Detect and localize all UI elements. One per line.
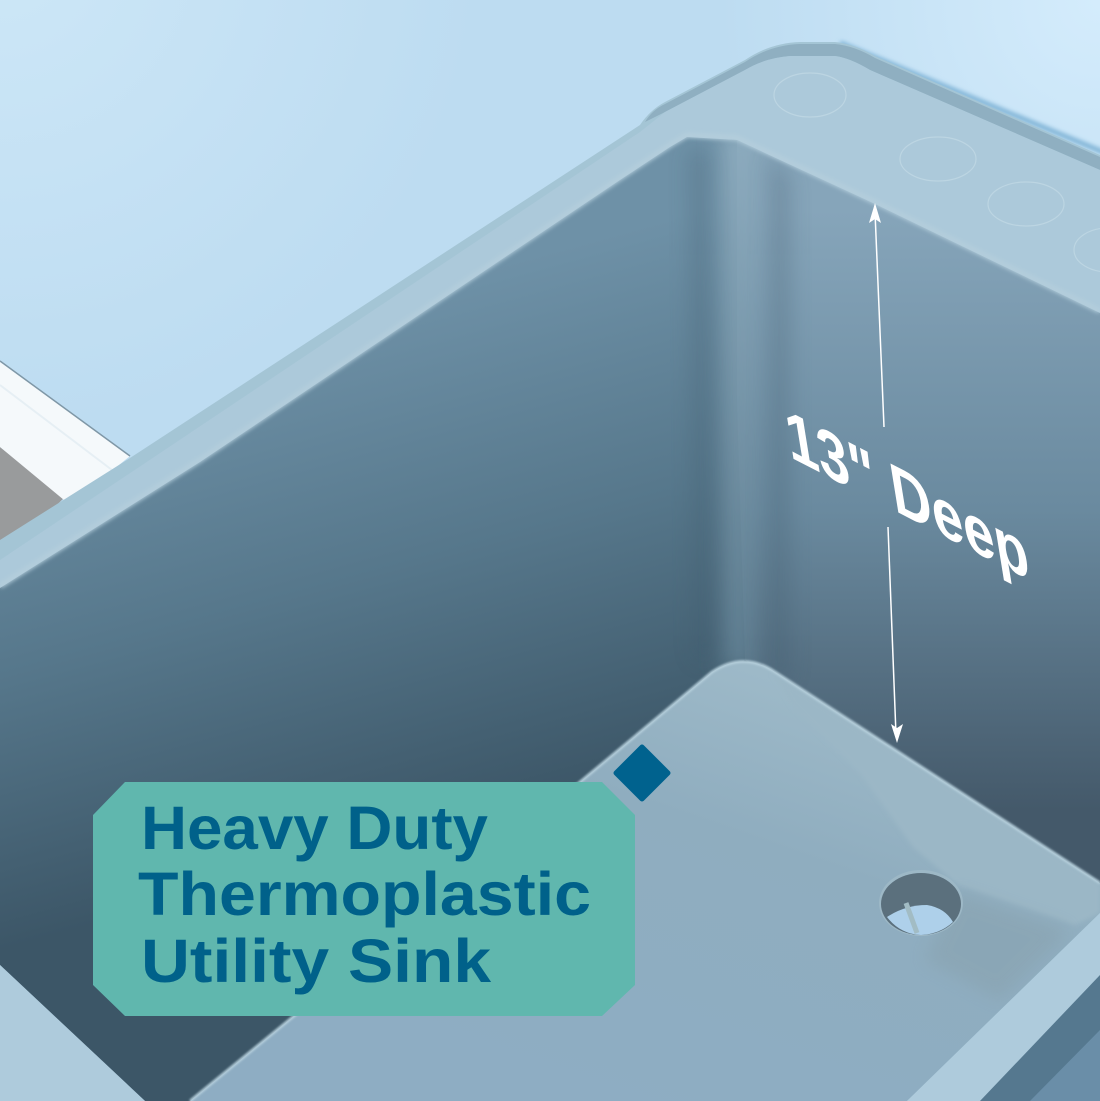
depth label: 13" Deep bbox=[780, 394, 1035, 597]
bottom right rim bbox=[907, 913, 1100, 1101]
baseboard and floor bbox=[0, 361, 130, 560]
wall corner shading bbox=[690, 130, 790, 680]
rim top surface bbox=[0, 56, 1100, 600]
rim lip bbox=[645, 44, 1100, 170]
right inner wall bbox=[737, 140, 1100, 885]
left inner wall bbox=[0, 137, 760, 1101]
depth arrow bbox=[869, 203, 903, 743]
rim circles bbox=[774, 73, 1100, 272]
diamond marker bbox=[616, 747, 668, 799]
callout line 3: Utility Sink bbox=[141, 927, 491, 995]
floor edge highlight bbox=[190, 661, 1100, 1101]
floor ridge bbox=[772, 672, 1100, 925]
floor shadow region bbox=[925, 892, 1070, 1000]
bottom left rim bbox=[0, 965, 145, 1101]
callout line 1: Heavy Duty bbox=[141, 794, 488, 862]
sink floor bbox=[190, 661, 1100, 1101]
callout line 2: Thermoplastic bbox=[138, 860, 591, 928]
drain hole bbox=[879, 870, 963, 936]
rim inner highlight bbox=[0, 135, 1100, 586]
callout bbox=[93, 782, 635, 1016]
rim shadow on wall bbox=[840, 43, 1100, 155]
